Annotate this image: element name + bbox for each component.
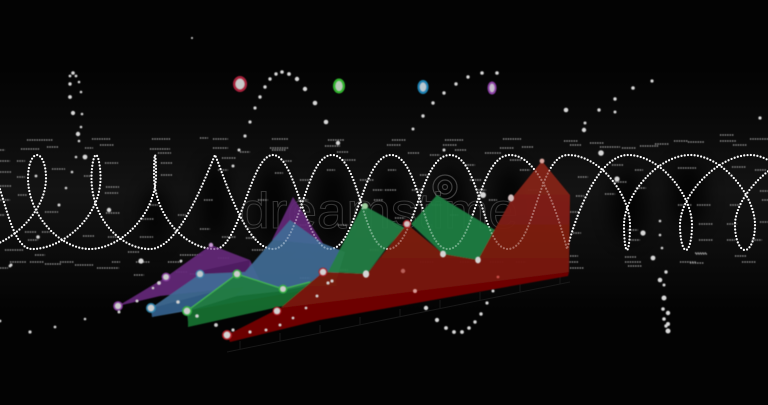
- dotted wave line: strand B: [0, 155, 768, 250]
- scattered white dots: second top arc: [191, 37, 762, 132]
- node: red series sixth: [440, 251, 446, 257]
- node: green series start: [182, 306, 192, 316]
- node: red series fourth: [363, 270, 369, 278]
- scattered white dots: top arc: [232, 70, 340, 168]
- chart node markers: [113, 159, 544, 340]
- node: blue series middle: [196, 270, 204, 278]
- node: red series eighth: [508, 194, 514, 202]
- legend marker: blue: [418, 80, 428, 94]
- data text rows texture: [0, 135, 768, 278]
- area chart: [118, 161, 570, 342]
- series: green area: [187, 195, 495, 327]
- scattered white dots: lower arc: [401, 269, 494, 334]
- node: green series second: [232, 269, 242, 279]
- series: purple area: [118, 197, 324, 306]
- series: blue area: [151, 220, 345, 317]
- node: red series second: [273, 307, 281, 315]
- dotted wave line: strand A: [0, 155, 768, 250]
- watermark logo spiral: [433, 175, 457, 199]
- series: red area: [227, 161, 570, 342]
- dark blotches under arcs: [143, 161, 706, 245]
- node: red series third: [319, 268, 327, 276]
- wave showing through chart: [0, 155, 768, 250]
- scattered white dots: lower chart trail: [0, 276, 499, 334]
- node: purple series: [113, 301, 123, 311]
- node: red series fifth: [403, 220, 411, 228]
- scattered white dots: left column arc: [9, 71, 182, 267]
- scattered white dots: right vertical trail: [442, 148, 670, 334]
- node: blue series start: [146, 303, 156, 313]
- background glow band: [0, 70, 768, 310]
- node: red series start: [222, 330, 232, 340]
- node: green peak: [362, 203, 368, 209]
- watermark text: dreamstime: [240, 183, 518, 239]
- node: green series third: [279, 285, 287, 293]
- node: red series seventh: [475, 257, 481, 263]
- node: purple series middle: [162, 273, 170, 281]
- legend marker: green: [333, 78, 345, 94]
- faint chart floor grid: [227, 276, 570, 352]
- legend marker: purple: [488, 82, 496, 94]
- legend marker: red: [233, 76, 247, 92]
- node: purple series peak: [209, 243, 213, 247]
- node: red series peak: [540, 159, 544, 163]
